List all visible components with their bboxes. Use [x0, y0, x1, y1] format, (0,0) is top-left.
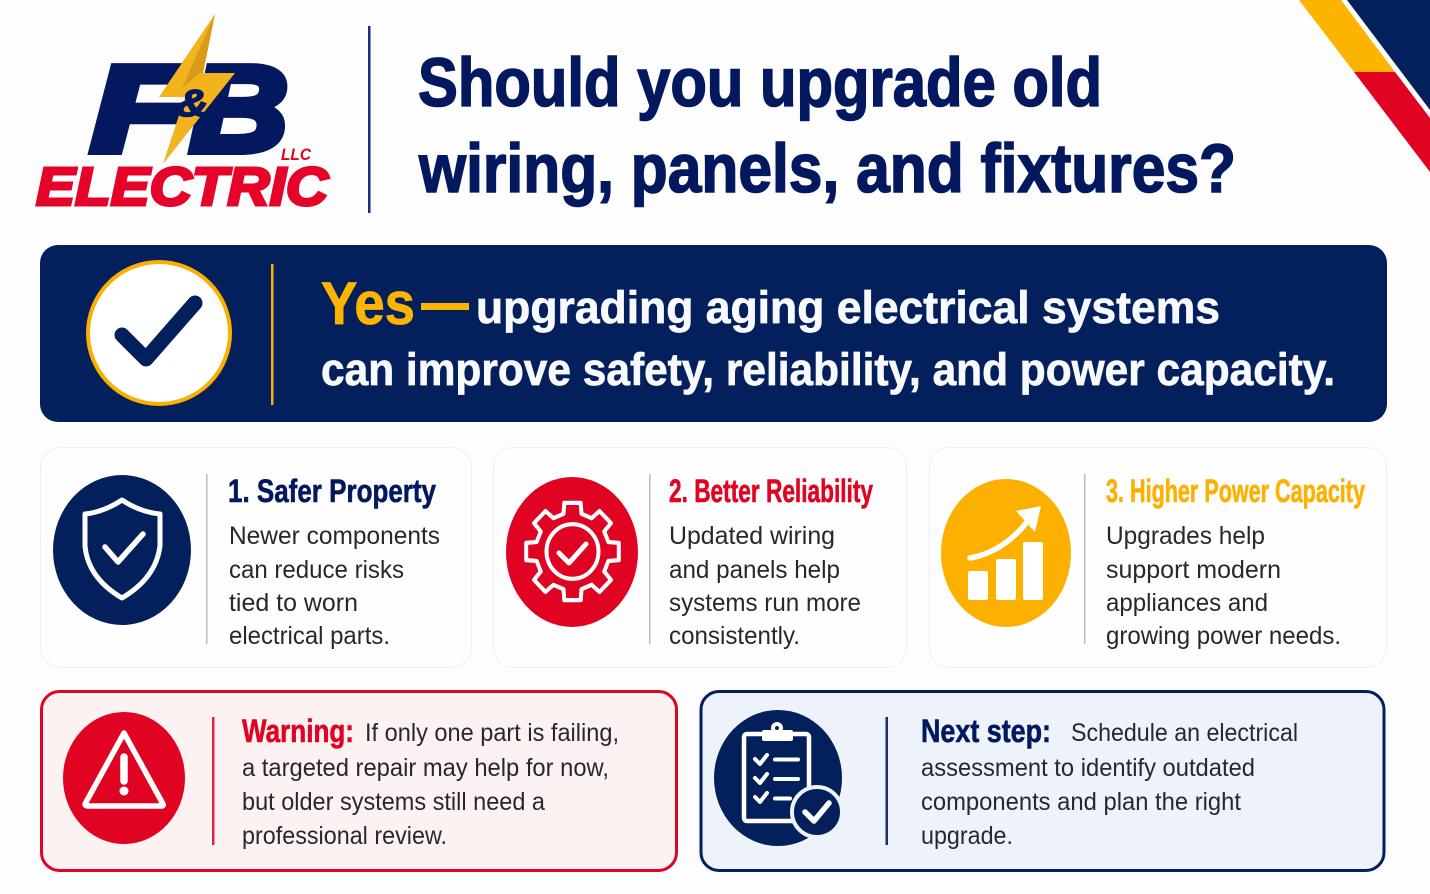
text block: support modern [1106, 556, 1281, 584]
next step text: upgrade. [921, 822, 1013, 850]
logo: F&B Electric LLC: LLC [281, 145, 312, 164]
banner text: Yes [321, 270, 415, 337]
text block: Updated wiring [669, 522, 835, 550]
logo: F&B Electric LLC: B [190, 41, 288, 177]
text block: systems run more [669, 589, 861, 617]
title: Should you upgrade old [418, 44, 1102, 121]
icon: shield [53, 475, 191, 625]
corner accent stripes [1299, 0, 1430, 172]
panel: yes answer banner [40, 245, 1387, 422]
warning text: a targeted repair may help for now, [242, 754, 609, 782]
warning text: If only one part is failing, [365, 719, 619, 747]
text block: Upgrades help [1106, 522, 1265, 550]
next step text: Next step: [921, 713, 1051, 749]
text block: appliances and [1106, 589, 1268, 617]
banner text: can improve safety, reliability, and power capacity. [321, 344, 1335, 395]
text block: consistently. [669, 622, 800, 650]
logo: F&B Electric LLC [36, 14, 329, 217]
warning text: professional review. [242, 822, 447, 850]
icon: warning triangle [63, 712, 185, 844]
text block [1106, 522, 1341, 650]
banner text: upgrading aging electrical systems [476, 282, 1220, 333]
panel: better reliability [494, 448, 906, 668]
heading: 2. Better Reliability [669, 473, 873, 509]
icon: check mark circle [88, 262, 230, 404]
title: wiring, panels, and fixtures? [418, 130, 1236, 207]
warning text: but older systems still need a [242, 788, 545, 816]
text block: can reduce risks [229, 556, 404, 584]
text block: growing power needs. [1106, 622, 1341, 650]
next step text: assessment to identify outdated [921, 754, 1255, 782]
icon: clipboard checklist [714, 710, 842, 846]
text block [669, 522, 861, 650]
next step text [921, 713, 1298, 850]
text block: tied to worn [229, 589, 358, 617]
icon: gear [506, 477, 638, 627]
panel: warning [42, 692, 676, 870]
panel: higher power capacity [930, 448, 1386, 668]
panel: next step [701, 692, 1384, 870]
heading: 1. Safer Property [228, 473, 436, 509]
warning text: Warning: [242, 713, 354, 749]
next step text: components and plan the right [921, 788, 1241, 816]
panel: safer property [40, 448, 472, 668]
title [418, 44, 1236, 207]
next step text: Schedule an electrical [1071, 719, 1298, 747]
logo: F&B Electric LLC: & [176, 83, 209, 125]
text block: and panels help [669, 556, 840, 584]
text block: electrical parts. [229, 622, 390, 650]
icon: rising bar chart [941, 479, 1071, 627]
banner text [321, 270, 1335, 395]
logo: F&B Electric LLC: ELECTRIC [36, 157, 329, 217]
text block [229, 522, 440, 650]
warning text [242, 713, 619, 850]
logo: F&B Electric LLC: F [91, 41, 196, 177]
text block: Newer components [229, 522, 440, 550]
